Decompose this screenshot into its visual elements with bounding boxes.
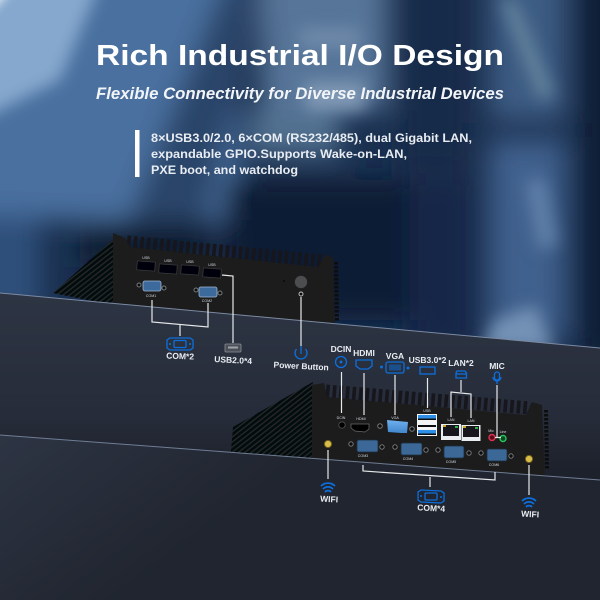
- callout: COM*4: COM*4: [417, 502, 446, 514]
- icon: dc jack: [336, 356, 346, 368]
- wifi antenna connectors: [324, 440, 533, 463]
- right fins: [336, 262, 337, 322]
- callout: MIC: [489, 361, 505, 438]
- usb 3.0 stack: [417, 409, 437, 436]
- rear com ports: COM3: [358, 454, 368, 458]
- subtitle: Flexible Connectivity for Diverse Industrial Devices: [96, 84, 504, 103]
- icon: serial port: [167, 338, 193, 350]
- side heat-sink fins: [231, 382, 313, 465]
- vga port: [378, 416, 414, 433]
- audio jacks: Mic: [488, 429, 494, 433]
- dc jack and hdmi: [337, 416, 369, 432]
- accent bar: [135, 130, 140, 177]
- usb 2.0 ports: [137, 261, 221, 278]
- power button: [283, 276, 308, 296]
- callout: COM*4: [363, 465, 495, 514]
- callout: DCIN: [331, 344, 351, 413]
- rear com ports: [349, 440, 513, 467]
- callout: left WIFI: [320, 450, 338, 504]
- callout: right WIFI: [521, 465, 539, 519]
- dc jack and hdmi: HDMI: [356, 417, 366, 421]
- title: Rich Industrial I/O Design: [96, 40, 504, 72]
- callout: COM*2: [152, 300, 208, 361]
- description text: expandable GPIO.Supports Wake-on-LAN,: [151, 147, 407, 161]
- callout: HDMI: [353, 348, 375, 415]
- icon: microphone: [493, 372, 501, 384]
- callout: DCIN: DCIN: [331, 344, 351, 354]
- icon: hdmi: [356, 360, 372, 369]
- callout: USB3.0*2: [409, 355, 447, 408]
- top cooling fins: [127, 242, 324, 261]
- audio jacks: Line: [500, 430, 506, 434]
- lan ports: LAN: [468, 419, 475, 423]
- device: top unit: [53, 233, 337, 330]
- dc jack and hdmi: DCIN: [337, 416, 346, 420]
- icon: wifi: [321, 483, 335, 492]
- description text: 8×USB3.0/2.0, 6×COM (RS232/485), dual Gigabit LAN,: [151, 131, 472, 145]
- callout: power button: Power Button: [273, 360, 329, 372]
- callout: USB2.0*4: [214, 275, 253, 366]
- side heat-sink fins: [53, 235, 118, 305]
- lan ports: LAN: [448, 418, 455, 422]
- front faceplate: [113, 233, 335, 330]
- icon: usb 3.0: [420, 367, 435, 374]
- com ports: [137, 281, 222, 303]
- callout: power button: [273, 297, 329, 372]
- callout: LAN*2: [448, 358, 474, 418]
- upper panel: [0, 293, 600, 500]
- description text: [151, 131, 472, 177]
- callout: HDMI: HDMI: [353, 348, 375, 358]
- blurred factory background: [0, 0, 600, 360]
- usb 3.0 stack: USB: [423, 409, 431, 413]
- callout: USB3.0*2: USB3.0*2: [409, 355, 447, 365]
- usb labels: USB: [186, 260, 194, 264]
- top cooling fins: [326, 391, 530, 408]
- usb labels: [142, 256, 216, 267]
- device: bottom unit: [231, 382, 547, 485]
- rear com ports: COM5: [446, 460, 456, 464]
- description text: PXE boot, and watchdog: [151, 163, 298, 177]
- rear com ports: COM6: [489, 463, 499, 467]
- usb labels: USB: [164, 259, 172, 263]
- callout: VGA: [380, 351, 410, 415]
- com ports: COM2: [202, 299, 212, 303]
- audio jacks: [488, 429, 506, 442]
- callout: left WIFI: WIFI: [320, 494, 338, 504]
- callout: LAN*2: LAN*2: [448, 358, 474, 368]
- icon: lan: [456, 371, 466, 378]
- vga port: VGA: [391, 416, 399, 420]
- icon: power: [295, 346, 307, 359]
- usb labels: USB: [142, 256, 150, 260]
- rear com ports: COM4: [403, 457, 413, 461]
- usb labels: USB: [208, 263, 216, 267]
- icon: usb port: [225, 344, 241, 352]
- callout: USB2.0*4: USB2.0*4: [214, 354, 253, 366]
- callout: VGA: VGA: [386, 351, 404, 361]
- right fins: [546, 410, 547, 470]
- callout: MIC: MIC: [489, 361, 505, 371]
- callout: COM*2: COM*2: [166, 351, 194, 361]
- icon: vga: [380, 362, 410, 373]
- icon: serial port: [418, 490, 444, 503]
- com ports: COM1: [146, 294, 156, 298]
- lan ports: [441, 418, 480, 441]
- callout: right WIFI: WIFI: [521, 509, 539, 519]
- bright top-left corner: [0, 0, 30, 35]
- front faceplate: [312, 383, 545, 485]
- lower panel: [0, 435, 600, 600]
- icon: wifi: [522, 498, 536, 507]
